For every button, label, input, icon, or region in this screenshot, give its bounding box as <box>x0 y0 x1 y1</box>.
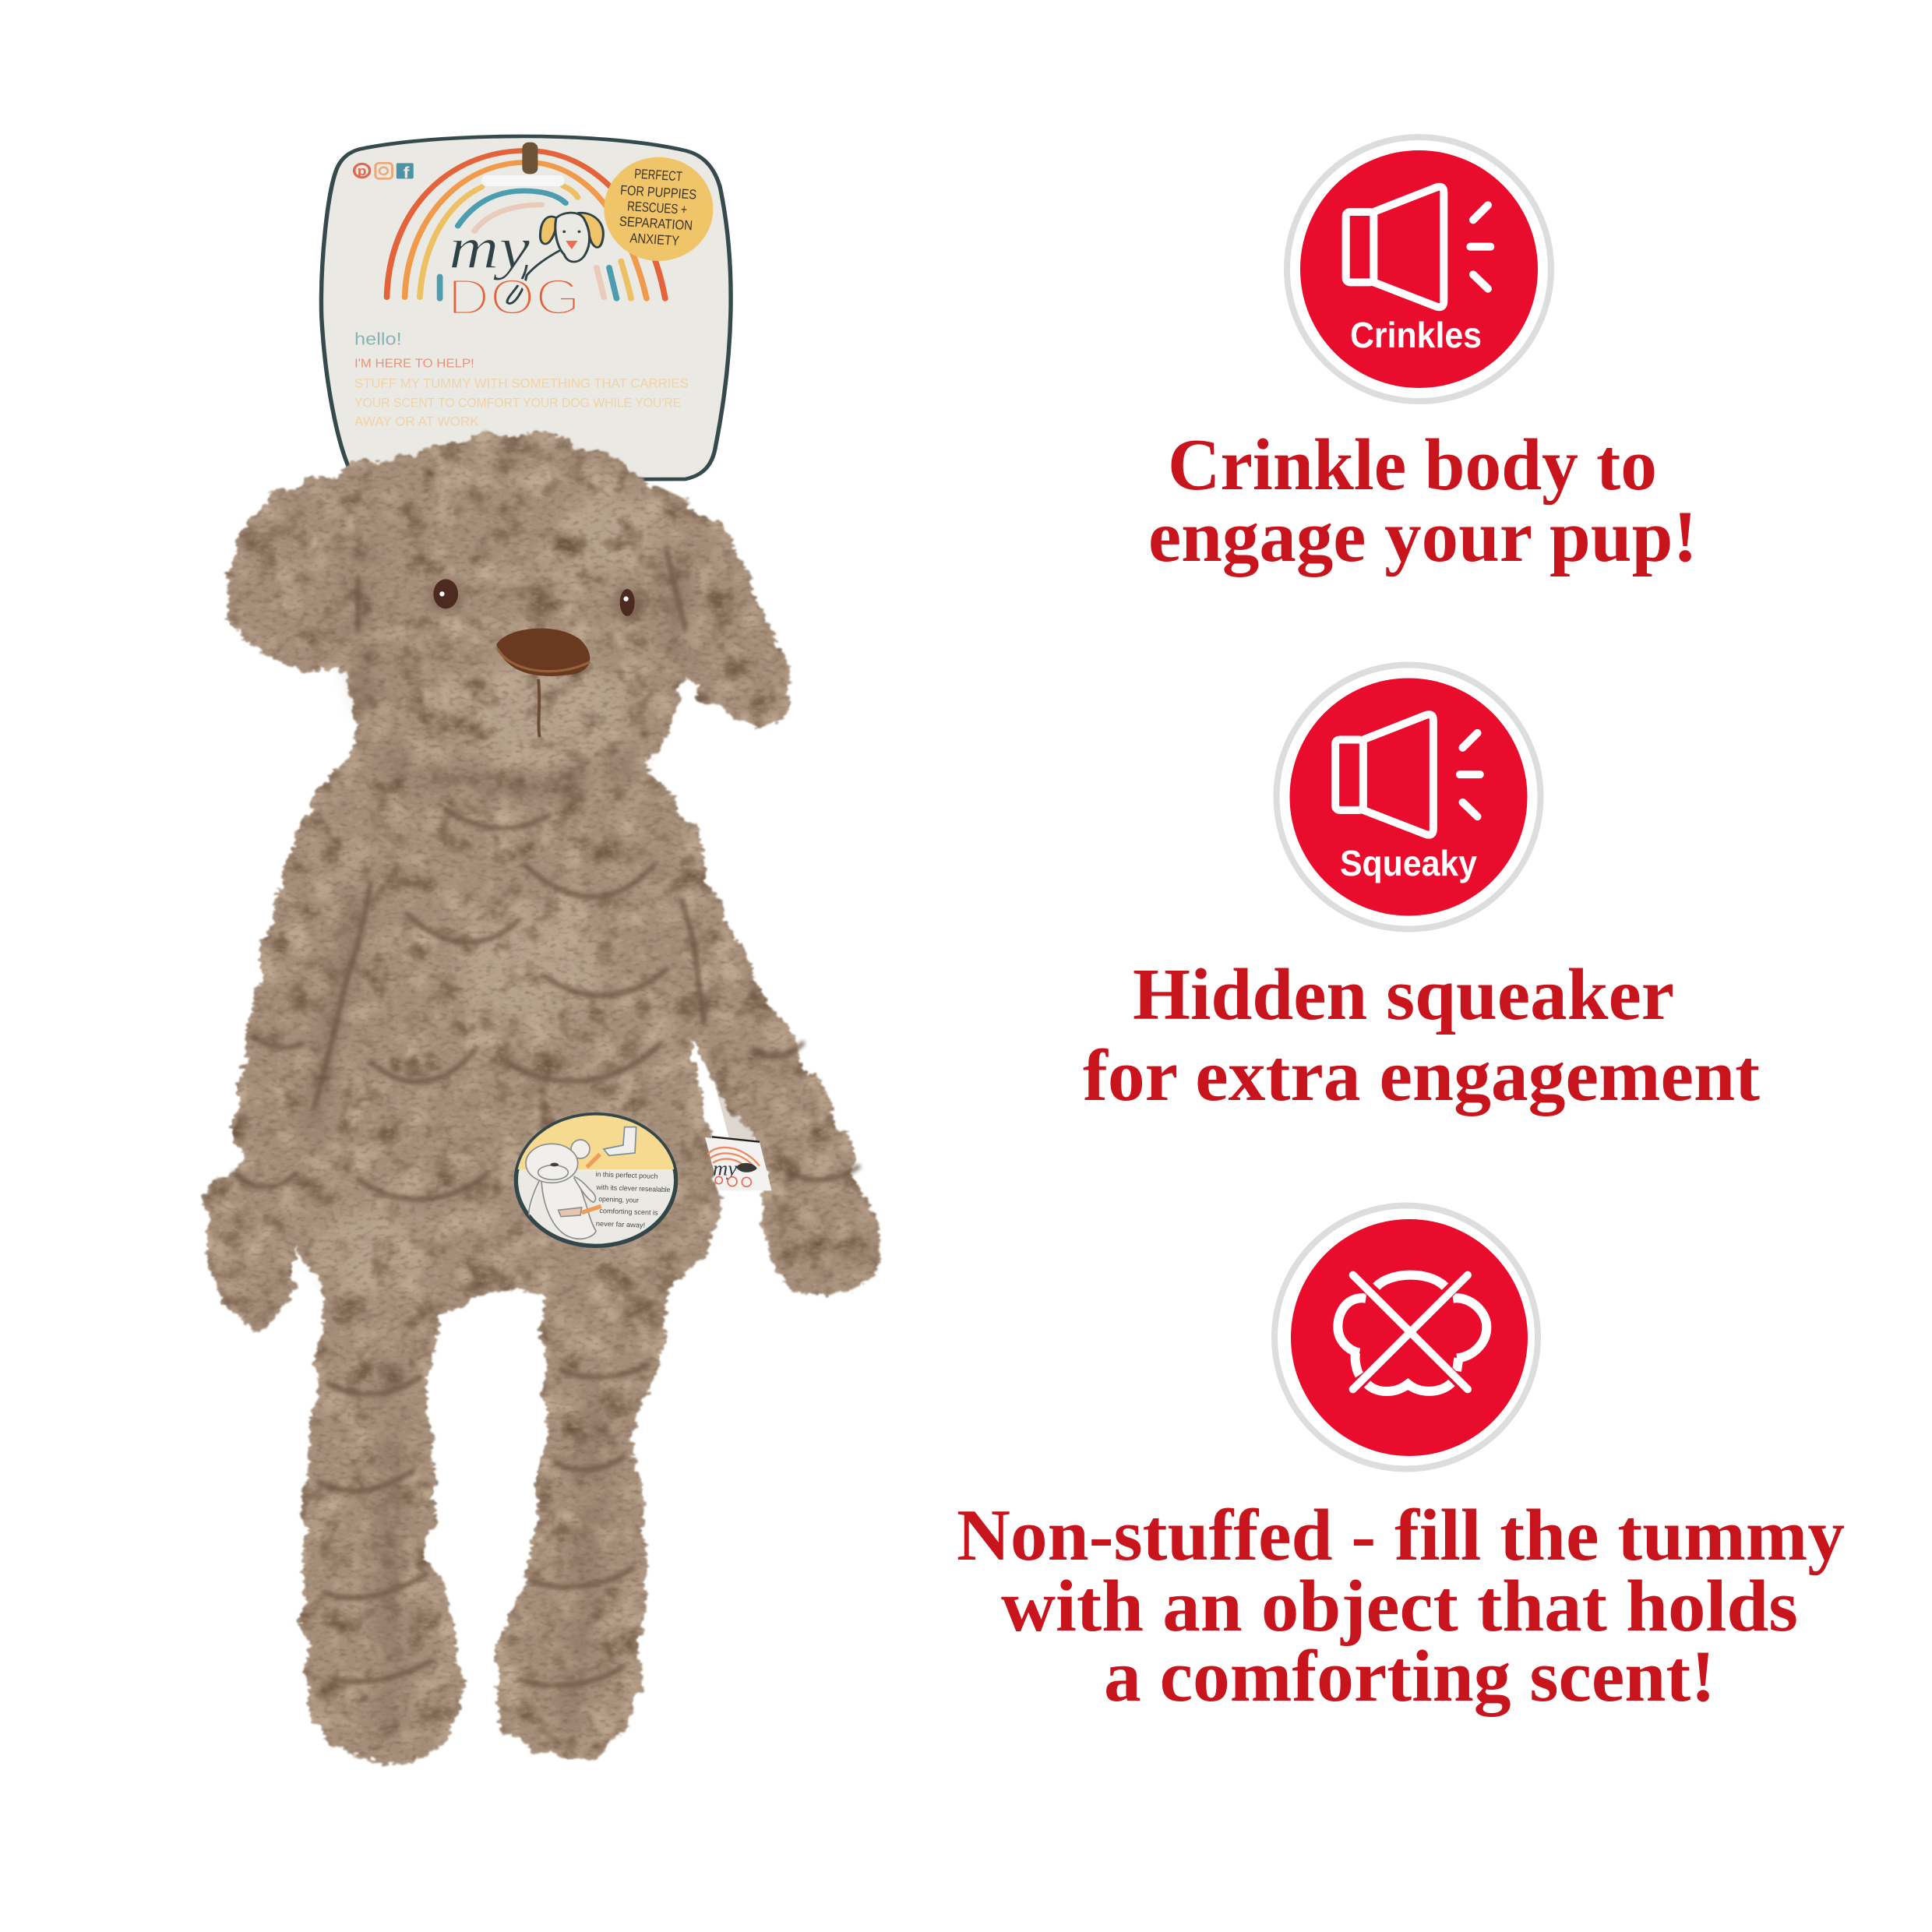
dog face <box>427 578 642 737</box>
pouch tag text: in this perfect pouch <box>595 1170 658 1180</box>
yellow badge: SEPARATION <box>619 213 693 233</box>
pouch tag text: opening, your <box>598 1195 639 1204</box>
my wordmark: my <box>449 214 530 280</box>
heading: crinkle body <box>1148 425 1698 577</box>
icon badge: non-stuffed <box>1274 1206 1538 1469</box>
icon badge: crinkles <box>1287 137 1551 401</box>
yellow badge: PERFECT <box>634 166 683 184</box>
pouch tag text: with its clever resealable <box>595 1183 671 1193</box>
badge label: Squeaky <box>1340 843 1477 883</box>
yellow badge: ANXIETY <box>629 230 680 249</box>
round pouch tag <box>514 1106 680 1246</box>
yellow badge: RESCUES + <box>626 199 688 217</box>
side fabric label: my <box>713 1156 737 1179</box>
tag message: AWAY OR AT WORK <box>354 414 479 428</box>
pouch tag text <box>594 1170 671 1230</box>
social icons: f <box>404 164 410 182</box>
yellow badge <box>604 157 713 261</box>
heading: hidden squeaker: Hidden squeaker <box>1133 954 1674 1035</box>
plush dog toy <box>204 435 883 1767</box>
heading: crinkle body: Crinkle body to <box>1168 425 1657 506</box>
icon: crossed-out stuffing cloud <box>1338 1275 1486 1391</box>
tag message: hello! <box>354 330 402 349</box>
logo dog head <box>540 213 603 262</box>
heading: hidden squeaker <box>1083 954 1760 1116</box>
side fabric label <box>705 1137 772 1190</box>
heading: non-stuffed: Non-stuffed - fill the tummy <box>957 1495 1845 1576</box>
fur folds and creases <box>234 543 858 1729</box>
infographic canvas <box>199 134 1845 1768</box>
heading: non-stuffed: with an object that holds <box>1001 1566 1798 1647</box>
pouch tag text: never far away! <box>596 1220 645 1229</box>
pouch tag text: comforting scent is <box>599 1207 658 1217</box>
bear drawing <box>526 1127 636 1239</box>
tag message: STUFF MY TUMMY WITH SOMETHING THAT CARRIES <box>354 376 689 390</box>
heading: non-stuffed <box>957 1495 1845 1717</box>
badge label: Crinkles <box>1350 315 1482 355</box>
heading: non-stuffed: a comforting scent! <box>1104 1636 1715 1717</box>
yellow badge: FOR PUPPIES <box>619 182 697 202</box>
DOG wordmark: DOG <box>447 268 580 325</box>
slot and peg <box>481 143 564 186</box>
social icons: p <box>358 164 366 178</box>
tag message: I'M HERE TO HELP! <box>354 356 474 370</box>
icon badge: squeaky <box>1276 665 1541 929</box>
heading: crinkle body: engage your pup! <box>1148 496 1698 577</box>
tag message: YOUR SCENT TO COMFORT YOUR DOG WHILE YOU'RE <box>354 396 681 410</box>
heading: hidden squeaker: for extra engagement <box>1083 1035 1760 1116</box>
hang tag card <box>321 136 731 481</box>
icon: speaker <box>1346 187 1490 307</box>
rainbow logo <box>387 150 665 298</box>
tag message <box>354 330 689 428</box>
icon: speaker <box>1335 714 1480 835</box>
social icons <box>354 163 414 182</box>
my wordmark <box>449 214 559 304</box>
